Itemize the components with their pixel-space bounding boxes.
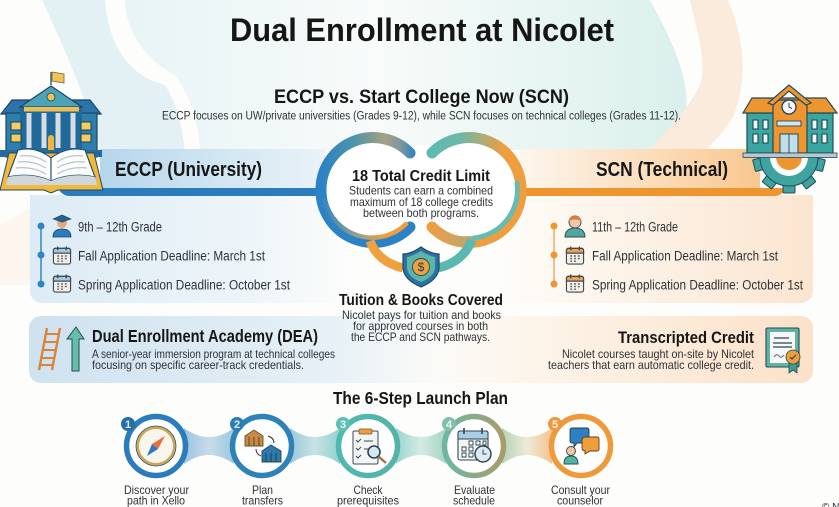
SCN heading: SCN (Technical) — [596, 159, 728, 181]
DEA description: focusing on specific career-track credentials. — [92, 358, 304, 372]
transcripted credit description — [548, 347, 755, 372]
step 1: discover — [121, 416, 189, 507]
title: Dual Enrollment at Nicolet — [230, 12, 614, 48]
icon: ladder and arrow — [39, 327, 84, 371]
transcripted credit heading: Transcripted Credit — [618, 329, 754, 347]
DEA description — [92, 347, 335, 372]
SCN details list: Fall Application Deadline: March 1st — [592, 248, 778, 264]
SCN details list: Spring Application Deadline: October 1st — [592, 278, 803, 292]
callout: credit limit: Students can earn a combined — [349, 184, 493, 198]
icon: university and open book — [0, 72, 103, 193]
panel: DEA and transcripted credit — [29, 316, 813, 383]
step 4: evaluate schedule — [442, 416, 504, 507]
callout: credit limit: between both programs. — [363, 206, 479, 220]
comparison description: ECCP focuses on UW/private universities (Grades 9-12), while SCN focuses on technical colleges (Grades 11-12). — [162, 110, 681, 122]
ECCP details list: Fall Application Deadline: March 1st — [78, 248, 265, 264]
icon: certificate — [766, 328, 800, 373]
graphic: interlocking rings — [321, 138, 521, 268]
step 2: plan transfers — [230, 416, 292, 507]
callout: credit limit: 18 Total Credit Limit — [352, 168, 491, 185]
ECCP details list: Spring Application Deadline: October 1st — [78, 278, 290, 292]
step 5: consult counselor: Consult your — [551, 483, 610, 497]
icon: shield with dollar — [403, 247, 439, 287]
heading: launch plan: The 6-Step Launch Plan — [333, 388, 508, 408]
step 5: consult counselor: 5 — [552, 419, 558, 431]
step 2: plan transfers: Plan — [252, 483, 273, 497]
step 5: consult counselor — [548, 416, 610, 507]
callout: tuition and books — [339, 292, 503, 344]
callout: credit limit: maximum of 18 college credits — [350, 195, 493, 209]
callout: tuition and books: Nicolet pays for tuition and books — [342, 308, 501, 322]
callout: tuition and books: Tuition & Books Covered — [339, 292, 503, 309]
ECCP details list — [38, 215, 290, 292]
step 3: check prerequisites — [336, 416, 399, 507]
step 3: check prerequisites: Check — [354, 483, 383, 497]
icon: shield with dollar: $ — [418, 260, 425, 274]
callout: tuition and books: for approved courses in both — [353, 319, 488, 333]
heading: comparison: ECCP vs. Start College Now (SCN) — [274, 87, 569, 108]
callout: credit limit — [349, 168, 493, 220]
SCN details list: 11th – 12th Grade — [592, 220, 678, 234]
DEA description: A senior-year immersion program at technical colleges — [92, 347, 335, 361]
transcripted credit description: Nicolet courses taught on-site by Nicolet — [562, 347, 755, 361]
panel: SCN — [505, 149, 813, 303]
step 1: discover: Discover your — [124, 483, 189, 497]
callout: tuition and books: the ECCP and SCN pathways. — [351, 330, 490, 344]
ECCP heading: ECCP (University) — [115, 159, 262, 181]
step 3: check prerequisites: 3 — [340, 419, 346, 431]
SCN details list — [550, 216, 803, 292]
transcripted credit description: teachers that earn automatic college credit. — [548, 358, 754, 372]
step 1: discover: 1 — [125, 419, 131, 431]
step 4: evaluate schedule: Evaluate — [454, 483, 495, 497]
step 2: plan transfers: 2 — [234, 419, 240, 431]
step connectors — [184, 428, 552, 464]
panel: ECCP — [30, 149, 345, 303]
DEA heading: Dual Enrollment Academy (DEA) — [92, 326, 318, 346]
ECCP details list: 9th – 12th Grade — [78, 220, 162, 234]
step 4: evaluate schedule: 4 — [446, 419, 453, 431]
icon: school and gear — [743, 85, 837, 193]
